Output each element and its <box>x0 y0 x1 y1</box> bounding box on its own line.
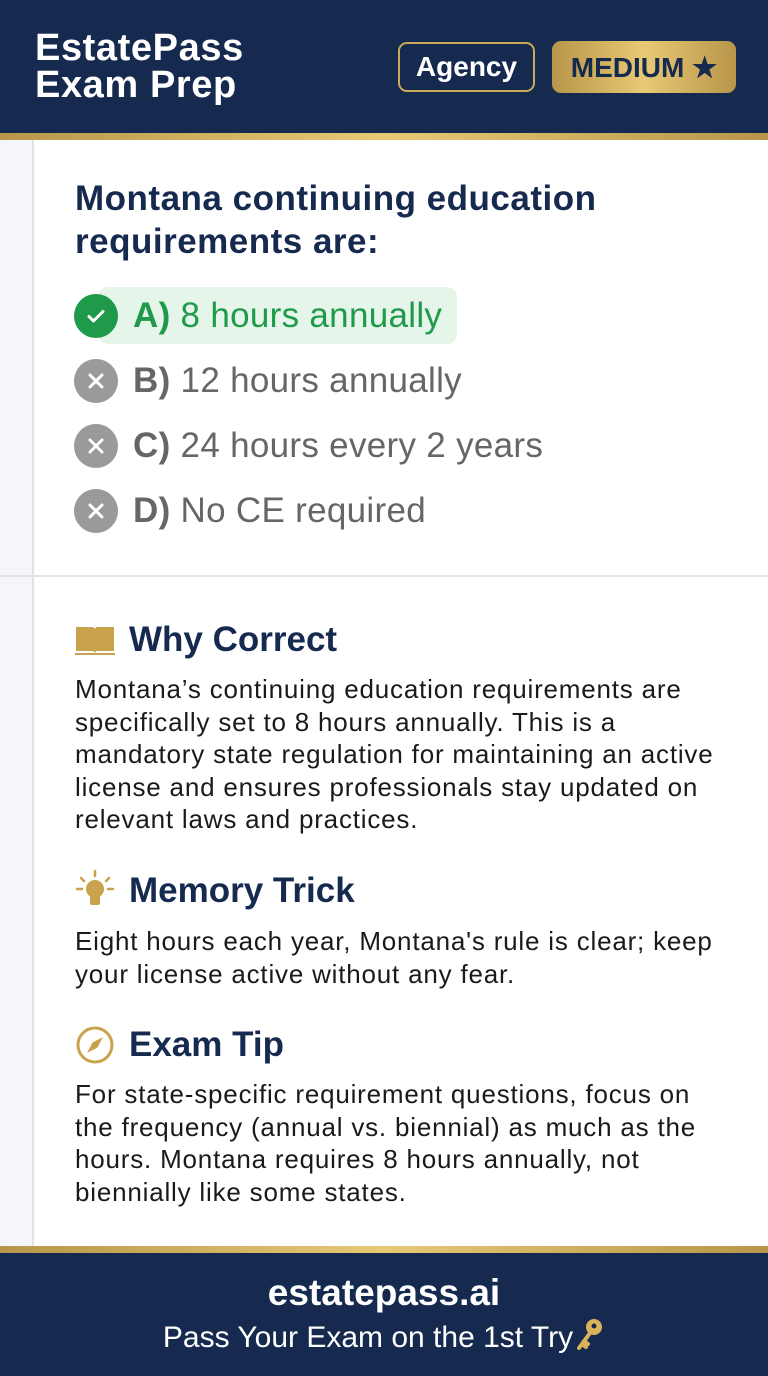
text: exam tip <box>75 1079 696 1206</box>
text: exam tip: For state-specific requirement questions, focus on <box>75 1079 690 1109</box>
text: why correct: mandatory state regulation for maintaining an active <box>75 739 714 769</box>
icon: lightbulb <box>76 870 114 905</box>
icon: check <box>74 294 118 338</box>
text: exam tip: hours. Montana requires 8 hours annually, not <box>75 1144 640 1174</box>
text: memory trick: Eight hours each year, Montana's rule is clear; keep <box>75 926 713 956</box>
question heading <box>75 179 596 261</box>
footer site name: estatepass.ai <box>268 1272 500 1313</box>
icon: book <box>75 627 115 655</box>
heading: Exam Tip: Exam Tip <box>129 1025 284 1064</box>
text: why correct <box>75 674 714 834</box>
question heading: requirements are: <box>75 222 379 261</box>
option D: D) No CE required <box>133 491 426 530</box>
icon: x <box>74 489 118 533</box>
text: why correct: Montana’s continuing education requirements are <box>75 674 682 704</box>
text: exam tip: biennially like some states. <box>75 1176 407 1206</box>
footer <box>0 1253 768 1376</box>
text: memory trick <box>75 926 713 988</box>
text: why correct: license and ensures professionals stay updated on <box>75 772 698 802</box>
header bar <box>0 0 768 133</box>
option A (correct): A) 8 hours annually <box>133 296 442 335</box>
icon: x <box>74 359 118 403</box>
option C: C) 24 hours every 2 years <box>133 426 543 465</box>
heading: Why Correct: Why Correct <box>129 620 337 659</box>
correct answer highlight <box>98 287 457 344</box>
badge: Agency: Agency <box>416 51 517 82</box>
option B: B) 12 hours annually <box>133 361 462 400</box>
text: why correct: specifically set to 8 hours annually. This is a <box>75 706 616 736</box>
footer tagline: Pass Your Exam on the 1st Try <box>163 1321 573 1354</box>
heading: Memory Trick: Memory Trick <box>129 871 355 910</box>
brand title: EstatePass <box>35 27 244 69</box>
icon: compass <box>76 1026 114 1064</box>
brand title <box>35 27 244 106</box>
text: memory trick: your license active without any fear. <box>75 958 515 988</box>
badge: Agency <box>398 42 535 92</box>
text: why correct: relevant laws and practices. <box>75 804 418 834</box>
brand title: Exam Prep <box>35 64 237 106</box>
badge: MEDIUM: MEDIUM ★ <box>571 52 717 82</box>
question heading: Montana continuing education <box>75 179 596 218</box>
badge: MEDIUM <box>552 41 736 93</box>
text: exam tip: the frequency (annual vs. biennial) as much as the <box>75 1112 696 1142</box>
icon: x <box>74 424 118 468</box>
